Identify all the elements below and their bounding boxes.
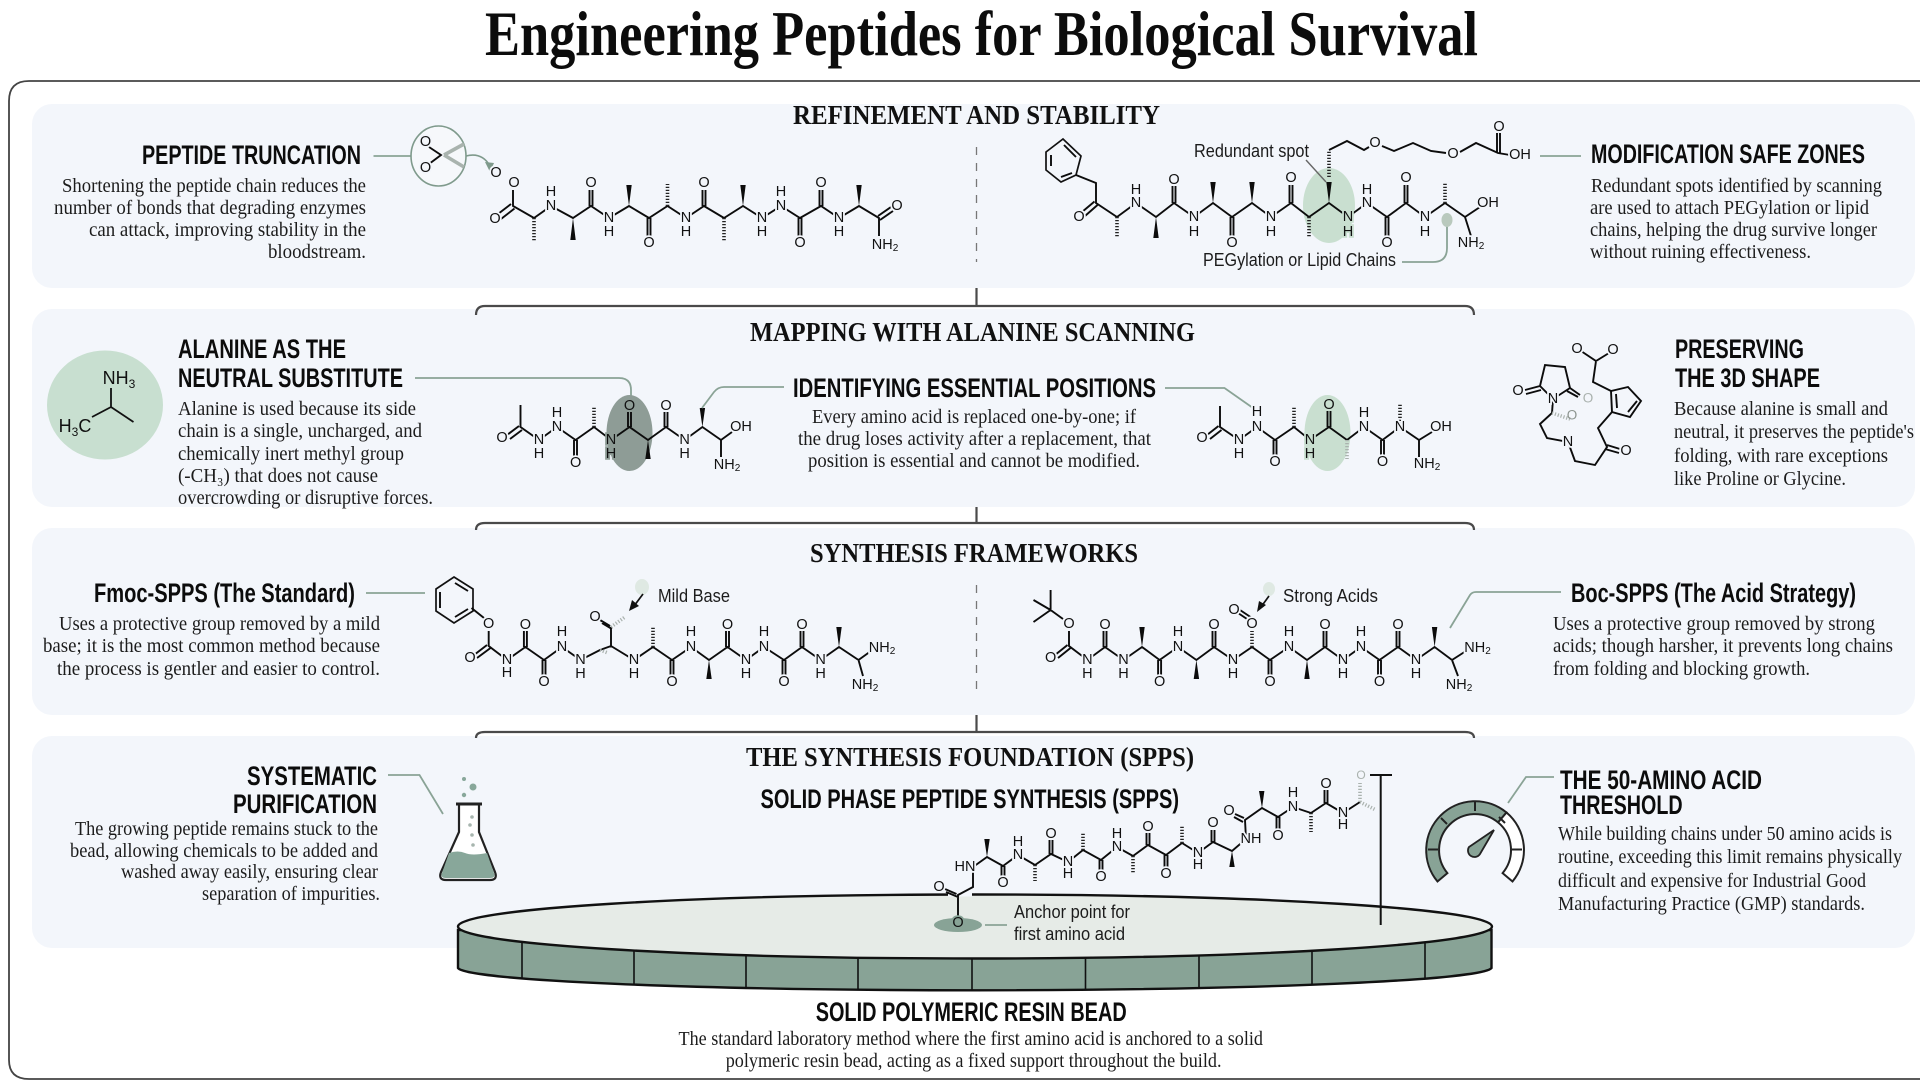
- highlight: redundant spot: [1303, 168, 1355, 243]
- molecule: Fmoc protected peptide: N: [759, 639, 769, 655]
- molecule: Boc protected peptide: H: [1228, 666, 1238, 682]
- molecule: truncated peptide: O: [794, 235, 806, 251]
- molecule: Boc protected peptide: 2: [1485, 646, 1491, 656]
- molecule: growing peptide on resin: H: [1063, 866, 1073, 882]
- molecule: alanine scan redundant position: H: [1359, 405, 1369, 421]
- molecule: Boc protected peptide: O: [1264, 674, 1276, 690]
- connector: alanine to molecule: [415, 378, 631, 400]
- molecule: Boc protected peptide: O: [1045, 650, 1056, 666]
- molecule: Fmoc protected peptide: H: [686, 624, 696, 640]
- molecule: alanine scan essential position: OH: [730, 419, 752, 435]
- molecule: PEGylated peptide with redundant spot: O: [1493, 119, 1505, 135]
- molecule: growing peptide on resin: N: [1063, 854, 1073, 870]
- text block: preserving the 3D shape: PRESERVING: [1675, 334, 1804, 364]
- molecule: Boc protected peptide: O: [1246, 616, 1258, 632]
- text block: Boc-SPPS: [1450, 578, 1893, 680]
- molecule: growing peptide on resin: [933, 768, 1376, 931]
- molecule: truncated peptide: N: [546, 198, 556, 214]
- molecule: growing peptide on resin: N: [1338, 805, 1348, 821]
- molecule: truncated peptide: O: [489, 211, 501, 227]
- molecule: Boc protected peptide: H: [1338, 666, 1348, 682]
- molecule: cyclic peptide 3D shape: [1512, 341, 1641, 465]
- molecule: alanine scan essential position: N: [606, 432, 616, 448]
- molecule: Fmoc protected peptide: N: [575, 652, 586, 668]
- molecule: alanine scan essential position: [496, 395, 752, 474]
- text block: preserving the 3D shape: folding, with rare exceptions: [1674, 446, 1888, 467]
- molecule: PEGylated peptide with redundant spot: O: [1226, 235, 1238, 251]
- molecule: Boc protected peptide: [1034, 582, 1491, 694]
- molecule: PEGylated peptide with redundant spot: O: [1381, 235, 1393, 251]
- molecule: Boc protected peptide: H: [1356, 624, 1366, 640]
- molecule: Fmoc protected peptide: O: [796, 617, 808, 633]
- molecule: alanine scan essential position: N: [552, 419, 562, 435]
- molecule: truncated peptide: N: [681, 210, 691, 226]
- subheading: solid phase peptide synthesis: SOLID PHASE PEPTIDE SYNTHESIS (SPPS): [760, 784, 1179, 814]
- molecule: truncated peptide: N: [776, 198, 786, 214]
- heading: synthesis frameworks: SYNTHESIS FRAMEWORKS: [810, 538, 1138, 568]
- molecule: Boc protected peptide: O: [1208, 617, 1220, 633]
- molecule: Boc protected peptide: H: [1411, 666, 1421, 682]
- molecule: Fmoc protected peptide: NH: [852, 677, 873, 693]
- text block: modification safe zones: Redundant spots identified by scanning: [1591, 176, 1882, 197]
- molecule: growing peptide on resin: O: [1207, 815, 1219, 831]
- molecule: PEGylated peptide with redundant spot: O: [1073, 209, 1085, 225]
- molecule: Fmoc protected peptide: H: [575, 666, 586, 682]
- title: Engineering Peptides for Biological Survival: [485, 0, 1478, 69]
- molecule: Boc protected peptide: NH: [1464, 640, 1485, 656]
- icon: gauge: [1426, 801, 1524, 882]
- icon: flask: [440, 777, 496, 880]
- molecule: Boc protected peptide: O: [1374, 674, 1385, 690]
- molecule: growing peptide on resin: HN: [955, 859, 975, 875]
- highlight: replaced residue: [606, 395, 652, 471]
- text block: 50-amino acid threshold: THRESHOLD: [1560, 790, 1683, 820]
- molecule: Boc protected peptide: O: [1228, 602, 1240, 618]
- molecule: cyclic peptide 3D shape: O: [1620, 443, 1632, 459]
- molecule: Boc protected peptide: N: [1082, 652, 1093, 668]
- molecule: growing peptide on resin: H: [1193, 857, 1203, 873]
- text block: 50-amino acid threshold: While building chains under 50 amino acids is: [1558, 824, 1892, 845]
- panel: refinement and stability: [32, 100, 1915, 288]
- molecule: Boc protected peptide: O: [1319, 617, 1331, 633]
- molecule: cyclic peptide 3D shape: N: [1563, 434, 1573, 450]
- text block: 50-amino acid threshold: difficult and expensive for Industrial Good: [1558, 871, 1866, 892]
- molecule: alanine scan redundant position: O: [1377, 454, 1388, 470]
- panel: mapping with alanine scanning: [32, 288, 1915, 509]
- text block: peptide truncation: number of bonds that degrading enzymes: [54, 198, 366, 219]
- icon: alanine structure: NH: [103, 368, 129, 388]
- label: strong acids: [1257, 582, 1378, 612]
- text block: alanine as the neutral substitute: (-CH₃) that does not cause: [178, 466, 378, 487]
- molecule: truncated peptide: O: [698, 175, 710, 191]
- molecule: growing peptide on resin: O: [933, 879, 945, 895]
- text block: systematic purification: separation of impurities.: [202, 884, 380, 905]
- molecule: alanine scan essential position: H: [534, 446, 544, 462]
- molecule: Fmoc protected peptide: H: [759, 624, 769, 640]
- molecule: Boc protected peptide: H: [1118, 666, 1129, 682]
- molecule: PEGylated peptide with redundant spot: N: [1343, 209, 1353, 225]
- molecule: Boc protected peptide: N: [1411, 652, 1421, 668]
- molecule: cyclic peptide 3D shape: N: [1548, 391, 1558, 407]
- molecule: truncated peptide: O: [508, 175, 520, 191]
- molecule: Boc protected peptide: O: [1154, 674, 1165, 690]
- text block: peptide truncation: Shortening the peptide chain reduces the: [62, 176, 366, 197]
- molecule: cyclic peptide 3D shape: O: [1583, 390, 1593, 406]
- molecule: PEGylated peptide with redundant spot: 2: [1479, 240, 1485, 252]
- icon: alanine structure: 3: [72, 425, 79, 439]
- text block: alanine as the neutral substitute: ALANINE AS THE: [178, 334, 346, 364]
- text block: Fmoc-SPPS: Uses a protective group removed by a mild: [59, 614, 380, 635]
- molecule: Fmoc protected peptide: NH: [869, 640, 890, 656]
- text block: modification safe zones: without ruining effectiveness.: [1590, 242, 1811, 263]
- molecule: alanine scan essential position: N: [679, 432, 690, 448]
- text block: systematic purification: washed away easily, ensuring clear: [121, 862, 378, 883]
- molecule: Fmoc protected peptide: H: [502, 665, 512, 681]
- molecule: Fmoc protected peptide: N: [686, 639, 696, 655]
- text block: Boc-SPPS: acids; though harsher, it prevents long chains: [1553, 636, 1893, 657]
- label: redundant spot: Redundant spot: [1194, 140, 1309, 161]
- connector: center heading to left molecule: [702, 387, 784, 408]
- molecule: PEGylated peptide with redundant spot: H: [1189, 224, 1199, 240]
- text block: systematic purification: bead, allowing chemicals to be added and: [70, 841, 378, 862]
- text block: alanine as the neutral substitute: Alanine is used because its side: [178, 399, 416, 420]
- molecule: growing peptide on resin: O: [1160, 866, 1172, 882]
- text block: peptide truncation: [54, 140, 366, 263]
- molecule: PEGylated peptide with redundant spot: H: [1266, 224, 1276, 240]
- molecule: truncated peptide: O: [490, 165, 502, 181]
- icon: alanine structure: C: [78, 416, 91, 436]
- molecule: Boc protected peptide: NH: [1446, 677, 1467, 693]
- text block: systematic purification: SYSTEMATIC: [247, 761, 377, 791]
- molecule: Fmoc protected peptide: H: [741, 666, 751, 682]
- molecule: truncated peptide: 2: [893, 242, 899, 254]
- molecule: Fmoc protected peptide: H: [629, 666, 639, 682]
- molecule: truncated peptide: H: [757, 224, 767, 240]
- icon: scissors cutting chain: O: [420, 134, 431, 150]
- molecule: Fmoc protected peptide: 2: [890, 646, 896, 656]
- molecule: truncated peptide: H: [834, 224, 844, 240]
- molecule: alanine scan redundant position: N: [1234, 432, 1244, 448]
- text block: 50-amino acid threshold: THE 50-AMINO ACID: [1560, 765, 1762, 795]
- molecule: Fmoc protected peptide: O: [722, 617, 733, 633]
- molecule: Fmoc protected peptide: [436, 577, 896, 694]
- molecule: truncated peptide: H: [604, 224, 614, 240]
- molecule: Boc protected peptide: H: [1082, 666, 1093, 682]
- molecule: truncated peptide: [489, 165, 903, 254]
- text block: preserving the 3D shape: [1674, 334, 1914, 490]
- molecule: PEGylated peptide with redundant spot: O: [1369, 135, 1381, 151]
- text block: systematic purification: PURIFICATION: [233, 789, 377, 819]
- text block: peptide truncation: PEPTIDE TRUNCATION: [142, 140, 361, 170]
- molecule: growing peptide on resin: H: [1338, 817, 1348, 833]
- text block: identifying essential positions: [793, 373, 1156, 472]
- highlight: tolerated residue: [1304, 395, 1350, 471]
- label: strong acids: Strong Acids: [1283, 585, 1378, 606]
- molecule: Fmoc protected peptide: H: [557, 624, 567, 640]
- molecule: Fmoc protected peptide: 2: [873, 682, 879, 694]
- molecule: truncated peptide: N: [604, 210, 614, 226]
- molecule: growing peptide on resin: O: [1045, 826, 1057, 842]
- molecule: PEGylated peptide with redundant spot: [1046, 119, 1531, 270]
- molecule: PEGylated peptide with redundant spot: H: [1131, 182, 1141, 198]
- icon: alanine structure: [47, 350, 163, 460]
- molecule: truncated peptide: H: [546, 184, 556, 200]
- molecule: growing peptide on resin: N: [1013, 847, 1023, 863]
- molecule: growing peptide on resin: O: [1320, 776, 1332, 792]
- molecule: PEGylated peptide with redundant spot: N: [1189, 209, 1199, 225]
- molecule: growing peptide on resin: O: [1142, 819, 1154, 835]
- molecule: Boc protected peptide: O: [1063, 616, 1075, 632]
- molecule: cyclic peptide 3D shape: O: [1567, 408, 1577, 422]
- icon: alanine structure: H: [59, 416, 72, 436]
- label: PEGylation or lipid chains: PEGylation or Lipid Chains: [1203, 249, 1396, 270]
- text block: systematic purification: [70, 761, 380, 905]
- molecule: Fmoc protected peptide: N: [557, 639, 567, 655]
- connector: purification to flask: [388, 775, 443, 814]
- text block: modification safe zones: chains, helping the drug survive longer: [1590, 220, 1877, 241]
- molecule: growing peptide on resin: NH: [1241, 831, 1261, 847]
- molecule: growing peptide on resin: O: [1356, 768, 1366, 782]
- molecule: growing peptide on resin: H: [1112, 826, 1122, 842]
- molecule: Boc protected peptide: H: [1173, 624, 1183, 640]
- molecule: Boc protected peptide: N: [1356, 639, 1366, 655]
- molecule: growing peptide on resin: O: [1095, 869, 1107, 885]
- molecule: alanine scan redundant position: NH: [1414, 456, 1435, 472]
- molecule: Fmoc protected peptide: H: [815, 666, 826, 682]
- molecule: alanine scan redundant position: N: [1395, 419, 1405, 435]
- molecule: Fmoc protected peptide: O: [520, 617, 531, 633]
- molecule: growing peptide on resin: O: [1223, 803, 1235, 819]
- molecule: PEGylated peptide with redundant spot: O: [1168, 172, 1180, 188]
- molecule: truncated peptide: H: [776, 184, 786, 200]
- molecule: cyclic peptide 3D shape: O: [1512, 383, 1524, 399]
- heading: refinement and stability: REFINEMENT AND STABILITY: [793, 100, 1160, 130]
- molecule: Fmoc protected peptide: O: [778, 674, 790, 690]
- molecule: Fmoc protected peptide: O: [538, 674, 550, 690]
- molecule: Fmoc protected peptide: N: [629, 652, 639, 668]
- molecule: Fmoc protected peptide: N: [741, 652, 751, 668]
- text block: Fmoc-SPPS: base; it is the most common method because: [43, 636, 380, 657]
- molecule: PEGylated peptide with redundant spot: N: [1131, 195, 1141, 211]
- molecule: alanine scan essential position: O: [496, 430, 508, 446]
- text block: peptide truncation: can attack, improving stability in the: [89, 220, 366, 241]
- text block: solid polymeric resin bead: polymeric resin bead, acting as a fixed support throughout the build.: [726, 1051, 1222, 1072]
- molecule: Fmoc protected peptide: O: [483, 616, 494, 632]
- anchor point on bead: [934, 901, 1130, 944]
- molecule: cyclic peptide 3D shape: O: [1571, 341, 1583, 357]
- molecule: alanine scan redundant position: O: [1196, 430, 1208, 446]
- molecule: PEGylated peptide with redundant spot: N: [1362, 195, 1372, 211]
- molecule: alanine scan redundant position: O: [1269, 454, 1281, 470]
- molecule: Fmoc protected peptide: N: [502, 652, 512, 668]
- molecule: alanine scan essential position: H: [552, 405, 562, 421]
- text block: alanine as the neutral substitute: chain is a single, uncharged, and: [178, 421, 422, 442]
- heading: mapping with alanine scanning: MAPPING WITH ALANINE SCANNING: [750, 317, 1195, 347]
- molecule: alanine scan redundant position: H: [1252, 404, 1262, 420]
- molecule: alanine scan essential position: NH: [714, 457, 735, 473]
- molecule: PEGylated peptide with redundant spot: N: [1420, 209, 1430, 225]
- text block: modification safe zones: [1540, 139, 1882, 263]
- text block: solid polymeric resin bead: The standard laboratory method where the first amino acid is anchored to a solid: [678, 1029, 1263, 1050]
- molecule: PEGylated peptide with redundant spot: H: [1362, 182, 1372, 198]
- text block: identifying essential positions: the drug loses activity after a replacement, that: [798, 429, 1152, 450]
- molecule: PEGylated peptide with redundant spot: H: [1420, 224, 1430, 240]
- text block: identifying essential positions: IDENTIFYING ESSENTIAL POSITIONS: [793, 373, 1156, 403]
- anchor point on bead: Anchor point for: [1014, 901, 1130, 922]
- connector: center heading to right molecule: [1165, 388, 1253, 408]
- molecule: Boc protected peptide: H: [1284, 624, 1294, 640]
- molecule: PEGylated peptide with redundant spot: O: [1447, 146, 1459, 162]
- heading: the synthesis foundation: THE SYNTHESIS FOUNDATION (SPPS): [746, 742, 1194, 772]
- text block: alanine as the neutral substitute: [178, 334, 433, 509]
- molecule: PEGylated peptide with redundant spot: N: [1266, 209, 1276, 225]
- text block: modification safe zones: are used to attach PEGylation or lipid: [1590, 198, 1869, 219]
- text block: peptide truncation: bloodstream.: [268, 242, 366, 263]
- molecule: Boc protected peptide: O: [1392, 617, 1404, 633]
- text block: Fmoc-SPPS: [43, 578, 425, 680]
- text block: solid polymeric resin bead: SOLID POLYMERIC RESIN BEAD: [816, 997, 1127, 1027]
- molecule: truncated peptide: O: [891, 198, 903, 214]
- anchor point on bead: first amino acid: [1014, 923, 1125, 944]
- molecule: PEGylated peptide with redundant spot: OH: [1509, 147, 1531, 163]
- text block: alanine as the neutral substitute: chemically inert methyl group: [178, 444, 404, 465]
- molecule: alanine scan redundant position: H: [1305, 446, 1315, 462]
- molecule: alanine scan redundant position: [1196, 395, 1452, 472]
- molecule: truncated peptide: NH: [872, 237, 893, 253]
- text block: Boc-SPPS: Uses a protective group removed by strong: [1553, 614, 1875, 635]
- connector: threshold to gauge: [1508, 777, 1554, 803]
- molecule: truncated peptide: N: [834, 210, 844, 226]
- molecule: Fmoc protected peptide: O: [666, 674, 678, 690]
- molecule: Fmoc protected peptide: O: [589, 609, 601, 625]
- panel: synthesis foundation: [32, 715, 1915, 948]
- molecule: alanine scan redundant position: N: [1305, 432, 1315, 448]
- molecule: growing peptide on resin: N: [1288, 799, 1298, 815]
- molecule: alanine scan redundant position: N: [1359, 419, 1369, 435]
- molecule: alanine scan essential position: H: [679, 446, 690, 462]
- text block: Boc-SPPS: from folding and blocking growth.: [1553, 659, 1810, 680]
- text block: 50-amino acid threshold: Manufacturing Practice (GMP) standards.: [1558, 894, 1865, 915]
- molecule: Boc protected peptide: N: [1118, 652, 1129, 668]
- molecule: Boc protected peptide: N: [1228, 652, 1238, 668]
- icon: scissors cutting chain: [374, 126, 494, 186]
- text block: 50-amino acid threshold: [1558, 765, 1902, 915]
- molecule: growing peptide on resin: O: [1272, 828, 1284, 844]
- molecule: Boc protected peptide: N: [1173, 639, 1183, 655]
- text block: identifying essential positions: Every amino acid is replaced one-by-one; if: [812, 407, 1136, 428]
- text block: preserving the 3D shape: Because alanine is small and: [1674, 399, 1888, 420]
- molecule: alanine scan redundant position: OH: [1430, 419, 1452, 435]
- molecule: growing peptide on resin: O: [997, 875, 1009, 891]
- text block: solid polymeric resin bead: [678, 997, 1263, 1072]
- molecule: PEGylated peptide with redundant spot: OH: [1477, 195, 1499, 211]
- molecule: truncated peptide: O: [585, 175, 597, 191]
- molecule: alanine scan essential position: O: [624, 398, 635, 414]
- text block: preserving the 3D shape: THE 3D SHAPE: [1675, 363, 1820, 393]
- label: mild base: Mild Base: [658, 585, 730, 606]
- text block: preserving the 3D shape: like Proline or Glycine.: [1674, 469, 1846, 490]
- molecule: growing peptide on resin: H: [1013, 834, 1023, 850]
- molecule: truncated peptide: O: [815, 175, 827, 191]
- molecule: growing peptide on resin: H: [1288, 785, 1298, 801]
- molecule: Boc protected peptide: N: [1284, 639, 1294, 655]
- molecule: PEGylated peptide with redundant spot: H: [1343, 224, 1353, 240]
- molecule: alanine scan essential position: O: [570, 455, 581, 471]
- resin bead disc: [458, 894, 1492, 991]
- label: mild base: [629, 579, 730, 611]
- molecule: alanine scan redundant position: H: [1234, 446, 1244, 462]
- text block: alanine as the neutral substitute: overcrowding or disruptive forces.: [178, 488, 433, 509]
- molecule: alanine scan essential position: 2: [735, 462, 741, 474]
- panel: synthesis frameworks: [32, 507, 1915, 715]
- molecule: alanine scan essential position: H: [606, 446, 616, 462]
- molecule: alanine scan redundant position: N: [1252, 419, 1262, 435]
- text block: systematic purification: The growing peptide remains stuck to the: [75, 819, 378, 840]
- text block: 50-amino acid threshold: routine, exceeding this limit remains physically: [1558, 847, 1902, 868]
- molecule: alanine scan redundant position: 2: [1435, 462, 1441, 472]
- molecule: alanine scan redundant position: O: [1323, 397, 1335, 413]
- molecule: cyclic peptide 3D shape: O: [1607, 342, 1619, 358]
- molecule: Fmoc protected peptide: N: [815, 652, 826, 668]
- molecule: alanine scan essential position: N: [534, 432, 544, 448]
- icon: scissors cutting chain: O: [420, 160, 431, 176]
- molecule: growing peptide on resin: N: [1112, 839, 1122, 855]
- molecule: PEGylated peptide with redundant spot: NH: [1458, 235, 1479, 251]
- text block: alanine as the neutral substitute: NEUTRAL SUBSTITUTE: [178, 363, 403, 393]
- text block: Fmoc-SPPS: Fmoc-SPPS (The Standard): [94, 578, 355, 608]
- molecule: Boc protected peptide: N: [1338, 652, 1348, 668]
- molecule: alanine scan essential position: O: [660, 398, 672, 414]
- icon: alanine structure: 3: [129, 377, 136, 391]
- molecule: Fmoc protected peptide: O: [464, 650, 476, 666]
- molecule: growing peptide on resin: N: [1193, 845, 1203, 861]
- molecule: truncated peptide: O: [643, 235, 655, 251]
- text block: Fmoc-SPPS: the process is gentler and easier to control.: [57, 659, 380, 680]
- molecule: PEGylated peptide with redundant spot: O: [1400, 170, 1412, 186]
- measuring post: [1370, 775, 1392, 925]
- molecule: Boc protected peptide: O: [1099, 617, 1111, 633]
- molecule: PEGylated peptide with redundant spot: O: [1285, 170, 1297, 186]
- molecule: growing peptide on resin: O: [952, 915, 964, 931]
- text block: identifying essential positions: position is essential and cannot be modified.: [808, 451, 1140, 472]
- molecule: truncated peptide: H: [681, 224, 691, 240]
- molecule: truncated peptide: N: [757, 210, 767, 226]
- molecule: Boc protected peptide: 2: [1467, 682, 1473, 694]
